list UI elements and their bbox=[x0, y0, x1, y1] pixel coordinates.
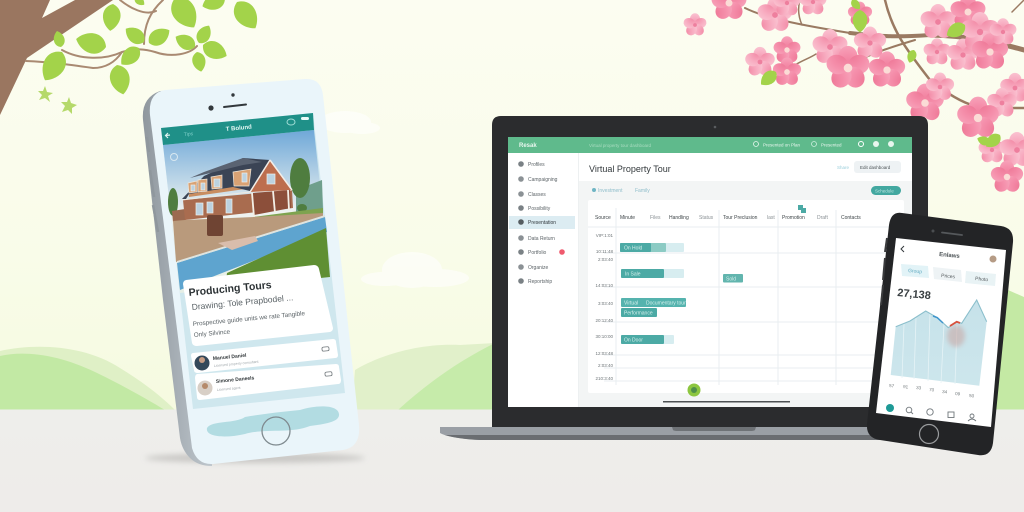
speaker and camera bbox=[208, 93, 246, 111]
sidebar: Data Return bbox=[528, 236, 555, 242]
eave trim bbox=[182, 190, 292, 200]
camera bbox=[714, 126, 716, 128]
app header: T Bolund bbox=[226, 124, 252, 133]
schedule bars: Virtual bbox=[624, 300, 638, 306]
dormers bbox=[188, 169, 251, 193]
phone body edge bbox=[143, 90, 212, 466]
table header: Files bbox=[650, 215, 661, 221]
laptop screen bbox=[508, 137, 912, 407]
laptop base underside bbox=[445, 435, 890, 440]
back arrow bbox=[166, 133, 170, 138]
card body: Prospective guide units we rate Tangible bbox=[193, 310, 306, 328]
time labels: 3:03:40 bbox=[598, 301, 613, 306]
pool platform bbox=[218, 236, 258, 250]
lawn front bbox=[225, 228, 330, 288]
sky bbox=[163, 130, 330, 293]
app header bbox=[161, 113, 314, 145]
app header bar: Resak bbox=[519, 143, 537, 149]
tabs bbox=[901, 264, 996, 286]
page title: Virtual Property Tour bbox=[589, 164, 671, 174]
metric value: 27,138 bbox=[897, 287, 931, 302]
table header: Status bbox=[699, 215, 714, 221]
schedule bars: In Sale bbox=[625, 272, 641, 278]
side buttons bbox=[881, 238, 887, 305]
pool bbox=[177, 217, 327, 290]
time labels: 2:03:40 bbox=[598, 363, 613, 368]
sidebar: Classes bbox=[528, 192, 546, 198]
cherry blossom branch bbox=[682, 0, 1024, 195]
info icon bbox=[170, 154, 178, 160]
trees bbox=[168, 158, 310, 216]
app header bar bbox=[508, 137, 912, 153]
laptop bezel bbox=[492, 116, 928, 427]
laptop bbox=[440, 116, 928, 440]
sidebar: Profiles bbox=[528, 162, 545, 168]
hinge notch bbox=[672, 427, 756, 431]
painted smear bbox=[207, 406, 339, 436]
axis labels bbox=[889, 383, 975, 399]
tabs: Photo bbox=[975, 276, 989, 283]
axis labels: 91 bbox=[903, 384, 909, 390]
tabs: Prices bbox=[941, 273, 956, 280]
house roof bbox=[182, 158, 270, 199]
sidebar: Campaigning bbox=[528, 177, 558, 183]
phone screen bbox=[876, 238, 1006, 427]
back chevron bbox=[901, 246, 904, 252]
bottom navigation bbox=[886, 404, 976, 421]
left phone bbox=[143, 79, 365, 466]
table header: Minute bbox=[620, 215, 635, 221]
hills bbox=[0, 290, 1024, 410]
time labels: 210:3:40 bbox=[595, 376, 613, 381]
table header: Source bbox=[595, 215, 611, 221]
tree: trunk and leaves bbox=[0, 0, 264, 115]
axis labels: 33 bbox=[916, 385, 922, 391]
table header bbox=[595, 215, 861, 221]
windows bbox=[191, 173, 275, 215]
green action dot bbox=[688, 384, 700, 396]
app header bar: Presented on Plan bbox=[763, 142, 801, 148]
top right actions bbox=[837, 161, 901, 173]
tabs bbox=[592, 188, 650, 194]
sidebar: Possibility bbox=[528, 206, 551, 212]
home indicator bbox=[663, 401, 790, 402]
schedule bars: On Door bbox=[624, 338, 643, 344]
time labels: 20:12:40 bbox=[595, 318, 613, 323]
side buttons bbox=[147, 137, 158, 232]
card body line two: Only Silvince bbox=[194, 328, 231, 339]
patio bbox=[173, 213, 323, 262]
agent row two: Licensed agent bbox=[217, 386, 241, 392]
phone body bbox=[867, 213, 1013, 455]
sidebar: Organize bbox=[528, 265, 549, 271]
speaker and lens bbox=[932, 230, 962, 235]
schedule bars bbox=[620, 243, 743, 344]
area chart bbox=[891, 300, 987, 386]
time labels: 14:03:10 bbox=[595, 283, 613, 288]
time labels: VIP:1:01 bbox=[596, 233, 613, 238]
schedule table bbox=[588, 200, 904, 393]
time labels: 10:11:48 bbox=[596, 249, 613, 254]
axis labels: 57 bbox=[889, 383, 895, 389]
table header: Promotion bbox=[782, 215, 805, 221]
content band bbox=[579, 181, 912, 407]
teal pill button: Schedule bbox=[875, 188, 894, 194]
time labels: 12:03:48 bbox=[595, 351, 613, 356]
axis labels: 70 bbox=[929, 387, 935, 393]
schedule bars: On Hold bbox=[624, 246, 643, 252]
table header: Contacts bbox=[841, 215, 861, 221]
distant water and trees bbox=[296, 180, 323, 212]
porch bbox=[253, 190, 291, 215]
roof ridge bbox=[190, 158, 262, 178]
schedule bars: Documentary tour bbox=[646, 300, 686, 306]
laptop base bbox=[440, 427, 890, 440]
sidebar bbox=[509, 153, 579, 407]
table header: Draft bbox=[817, 215, 828, 221]
floor bbox=[0, 410, 1024, 512]
avatar bbox=[990, 256, 996, 262]
gable bbox=[250, 160, 292, 192]
home button bbox=[920, 424, 938, 444]
time labels: 2:03:40 bbox=[598, 257, 613, 262]
tabs: Investment bbox=[598, 188, 623, 194]
screen background bbox=[161, 113, 345, 409]
right phone bbox=[867, 213, 1013, 455]
agent row one: Manuel Daniel bbox=[213, 353, 247, 362]
clouds bbox=[319, 111, 469, 288]
table header: Tour Preclusion bbox=[723, 215, 758, 221]
tabs: Family bbox=[635, 188, 650, 194]
app header: Tips bbox=[184, 131, 194, 138]
axis labels: 09 bbox=[955, 391, 961, 397]
time labels: 30:10:00 bbox=[595, 334, 613, 339]
agent row two: Simone Daneels bbox=[216, 375, 255, 385]
table header: Handling bbox=[669, 215, 689, 221]
lawn behind house bbox=[253, 208, 323, 222]
teal pill button bbox=[871, 186, 901, 195]
dormer walls bbox=[188, 168, 252, 197]
app header bar: Presented bbox=[821, 142, 842, 148]
top right actions: Share bbox=[837, 165, 850, 170]
table header: last bbox=[767, 215, 775, 221]
info card bbox=[183, 265, 333, 346]
app header bar: Virtual property tour dashboard bbox=[589, 143, 651, 148]
agent row one: Licensed property consultant bbox=[214, 360, 259, 368]
axis labels: 34 bbox=[942, 389, 948, 395]
small teal marker bbox=[798, 205, 806, 213]
agent row two bbox=[195, 364, 341, 400]
schedule bars: Performance bbox=[624, 310, 653, 316]
schedule bars: Sold bbox=[726, 276, 736, 282]
patio barrel bbox=[207, 215, 223, 236]
property photo bbox=[163, 130, 330, 293]
sidebar: Presentation bbox=[528, 220, 556, 226]
time labels bbox=[595, 233, 613, 381]
house walls bbox=[183, 190, 293, 220]
card subtitle: Drawing: Tole Prapbodel ... bbox=[191, 292, 294, 312]
card title: Producing Tours bbox=[188, 279, 272, 299]
screen title: Enlaws bbox=[939, 252, 961, 260]
hedge bbox=[172, 209, 186, 222]
sidebar: Portfolio bbox=[528, 250, 547, 256]
top right actions: Edit dashboard bbox=[860, 165, 891, 170]
agent row one bbox=[191, 339, 338, 373]
tabs: Group bbox=[908, 268, 922, 275]
phone face bbox=[150, 79, 359, 464]
axis labels: 50 bbox=[969, 393, 975, 399]
sidebar: Reportship bbox=[528, 279, 552, 285]
home button bbox=[262, 417, 290, 445]
